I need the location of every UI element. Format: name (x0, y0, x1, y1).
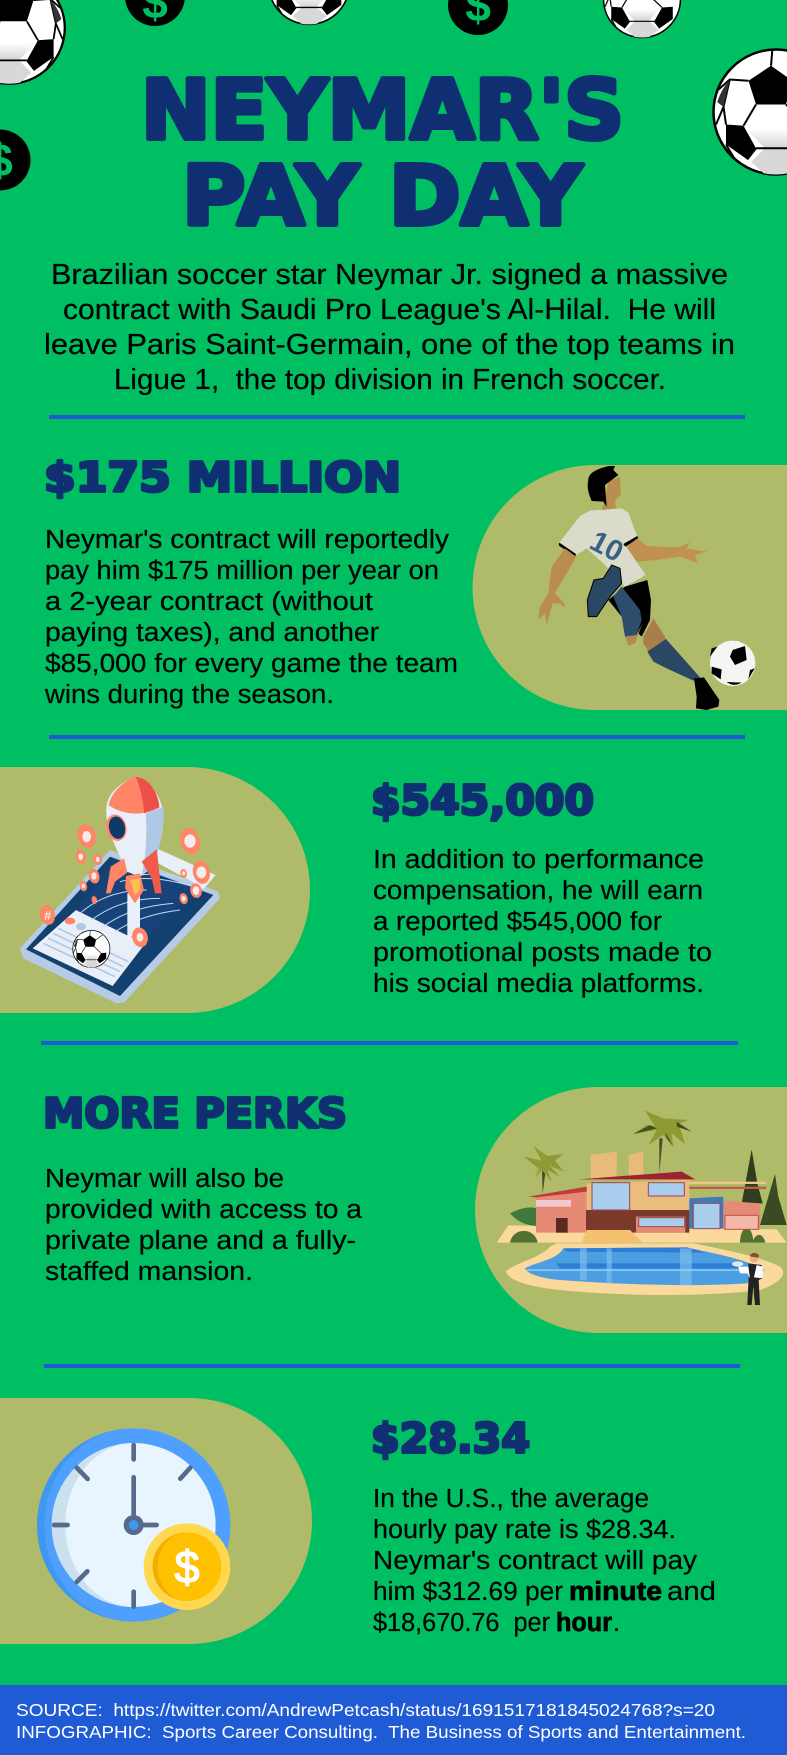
icon: soccer ball top right (604, 0, 680, 37)
intro text: leave Paris Saint-Germain, one of the top teams in (44, 329, 735, 361)
text block: Neymar will also be (45, 1165, 284, 1193)
text block: him $312.69 per (373, 1578, 564, 1606)
icon: rocket and tablet (20, 777, 220, 1003)
text block: In the U.S., the average (373, 1485, 649, 1513)
text block (373, 846, 712, 998)
text block: . (613, 1609, 620, 1637)
pill background (0, 1398, 312, 1644)
intro text: contract with Saudi Pro League's Al-Hilal. He will (63, 294, 716, 326)
heading: $545,000 (371, 776, 594, 824)
icon: soccer player: 10 (584, 524, 629, 569)
intro text: Brazilian soccer star Neymar Jr. signed a massive (51, 259, 728, 291)
text block: $85,000 for every game the team (45, 650, 458, 678)
credit line: INFOGRAPHIC: Sports Career Consulting. The Business of Sports and Entertainment. (16, 1722, 746, 1742)
icon: soccer ball right (714, 50, 787, 174)
title: PAY DAY (182, 150, 584, 244)
intro text: Ligue 1, the top division in French soccer. (114, 364, 666, 396)
title: NEYMAR'S (141, 64, 624, 158)
title (141, 64, 624, 244)
text block: $18,670.76 per (373, 1609, 550, 1637)
text block: private plane and a fully- (45, 1227, 356, 1255)
text block (373, 1485, 716, 1637)
text block: hourly pay rate is $28.34. (373, 1516, 676, 1544)
icon: mansion with pool (497, 1111, 787, 1305)
panel: 175 million (44, 454, 787, 710)
heading: $28.34 (371, 1414, 530, 1462)
text block: hour (556, 1609, 612, 1637)
icon: clock and coin (37, 1428, 230, 1622)
icon: dollar coin 1 (125, 0, 185, 28)
text block (44, 526, 458, 709)
heading: $175 MILLION (44, 454, 401, 502)
icon: dollar coin 2 (448, 0, 508, 35)
text block: compensation, he will earn (373, 877, 703, 905)
icon: dollar coin 3 (0, 130, 30, 190)
icon: soccer ball top left (0, 0, 65, 84)
pill background (475, 1087, 787, 1333)
icon: soccer player (538, 466, 755, 710)
pill background (473, 465, 787, 710)
text block: Neymar's contract will pay (373, 1547, 697, 1575)
text block (45, 1165, 363, 1286)
panel: 28.34 (0, 1398, 716, 1644)
footer (0, 1685, 787, 1755)
pill background (0, 767, 310, 1013)
text block: wins during the season. (44, 681, 334, 709)
text block: Neymar's contract will reportedly (45, 526, 449, 554)
source line: SOURCE: https://twitter.com/AndrewPetcash/status/1691517181845024768?s=20 (16, 1700, 715, 1720)
text block: a reported $545,000 for (373, 908, 663, 936)
text block: pay him $175 million per year on (45, 557, 439, 585)
icon: clock and coin: $ (174, 1542, 200, 1593)
panel: more perks (43, 1087, 787, 1333)
text block: promotional posts made to (373, 939, 712, 967)
panel: 545,000 (0, 767, 712, 1013)
decorative soccer balls and dollar coins (0, 0, 787, 190)
text block: In addition to performance (373, 846, 704, 874)
text block: and (667, 1578, 716, 1606)
text block: minute (569, 1578, 662, 1606)
icon: soccer ball top center (269, 0, 349, 24)
heading: MORE PERKS (43, 1090, 347, 1138)
text block: paying taxes), and another (45, 619, 380, 647)
text block: a 2-year contract (without (45, 588, 373, 616)
intro text (44, 259, 735, 396)
icon: rocket and tablet: # (44, 909, 51, 923)
text block: staffed mansion. (45, 1258, 253, 1286)
text block: provided with access to a (45, 1196, 363, 1224)
text block: his social media platforms. (373, 970, 704, 998)
